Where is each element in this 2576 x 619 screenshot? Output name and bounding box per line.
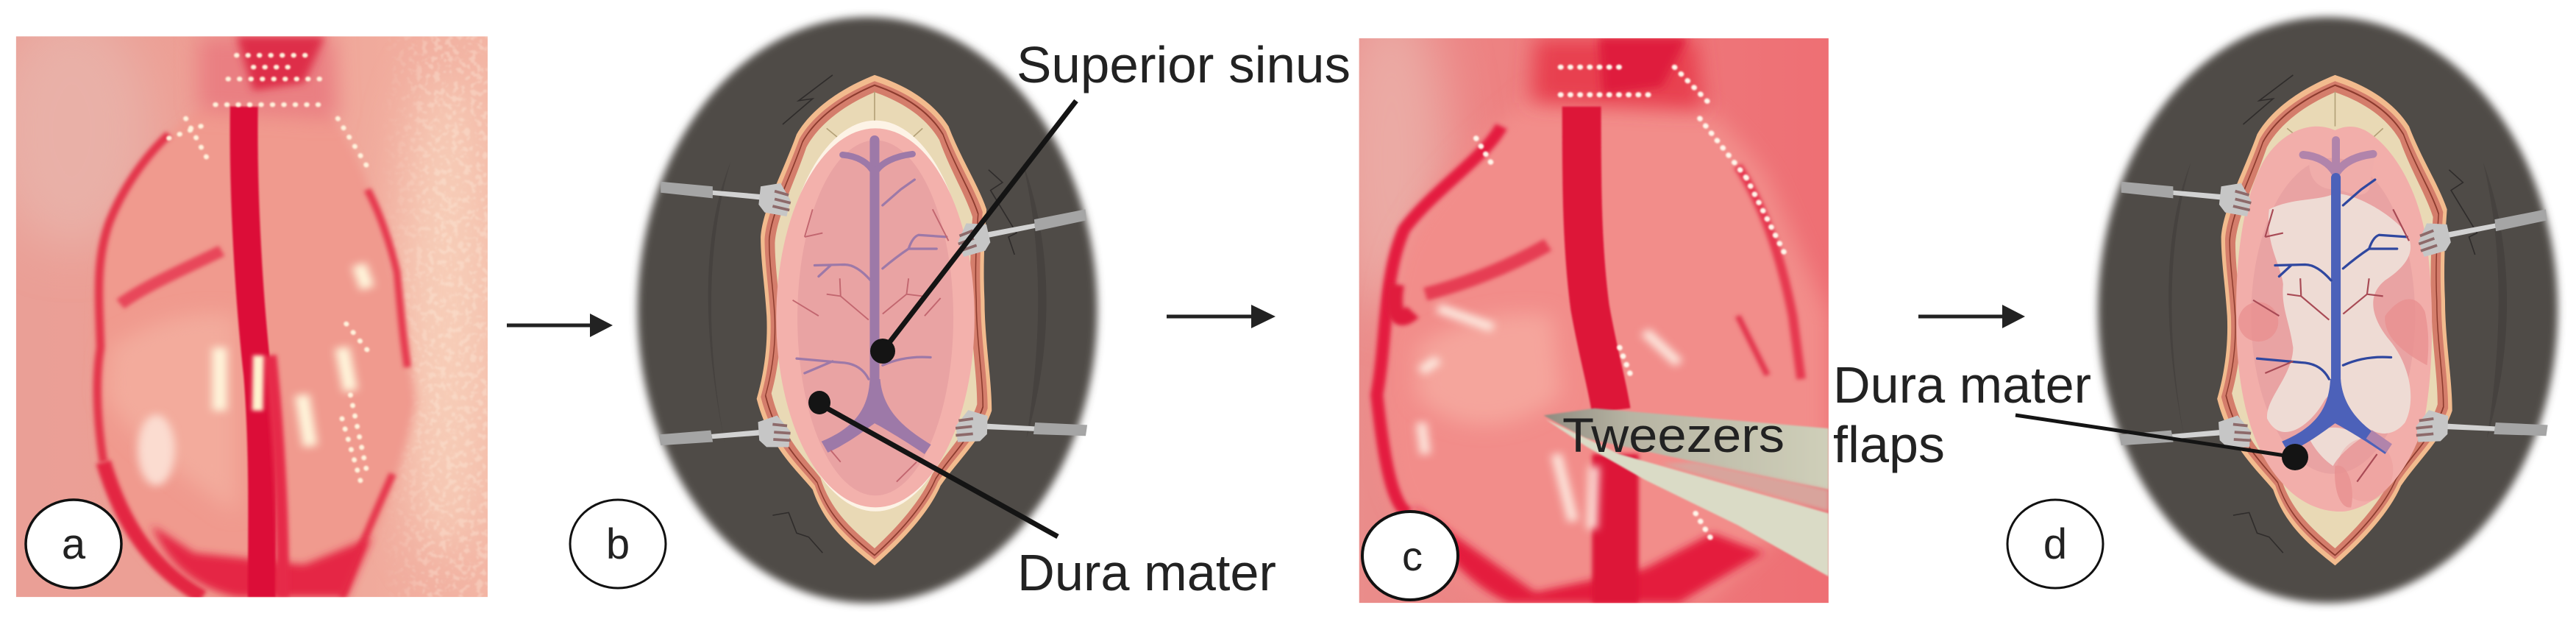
exposed cortex — [2267, 194, 2410, 434]
arrow 3 — [1918, 305, 2025, 328]
label circle a: a — [62, 520, 86, 568]
small arteries — [793, 209, 949, 482]
dura flaps — [2236, 127, 2432, 512]
callout: superior sinus: Superior sinus — [1017, 36, 1351, 93]
label circle d — [2007, 500, 2103, 588]
label circle a — [26, 500, 121, 588]
label circle d: d — [2043, 520, 2067, 568]
illustration d: head with dura mater opened — [2098, 17, 2558, 603]
photo a: opened skull under microscope — [0, 12, 494, 597]
label circle c: c — [1402, 533, 1423, 579]
tweezers — [1543, 408, 1829, 489]
exposed vessels — [2257, 140, 2407, 454]
retractors — [2121, 182, 2251, 216]
callout: dura mater — [808, 391, 1276, 601]
folded flap lobes — [2238, 299, 2428, 508]
photo c: dura mater lifted with tweezers — [1359, 38, 1829, 604]
retractors — [661, 182, 791, 216]
label circle b: b — [606, 520, 630, 568]
arrow 2 — [1167, 305, 1275, 328]
callout: dura mater flaps — [1833, 356, 2308, 473]
callout: superior sinus — [870, 36, 1351, 364]
illustration b: head with dura mater intact — [638, 17, 1097, 603]
callout: dura mater flaps: Dura mater — [1833, 356, 2091, 414]
label circle b — [570, 500, 666, 588]
cream ring and dura — [780, 121, 972, 512]
superior sinus vessels — [797, 140, 947, 454]
callout: dura mater flaps: flaps — [1833, 416, 1945, 473]
label: tweezers: Tweezers — [1562, 408, 1785, 462]
arrow 1 — [507, 314, 613, 337]
label circle c — [1362, 512, 1458, 600]
small arteries — [2253, 209, 2409, 482]
callout: dura mater: Dura mater — [1017, 544, 1276, 601]
